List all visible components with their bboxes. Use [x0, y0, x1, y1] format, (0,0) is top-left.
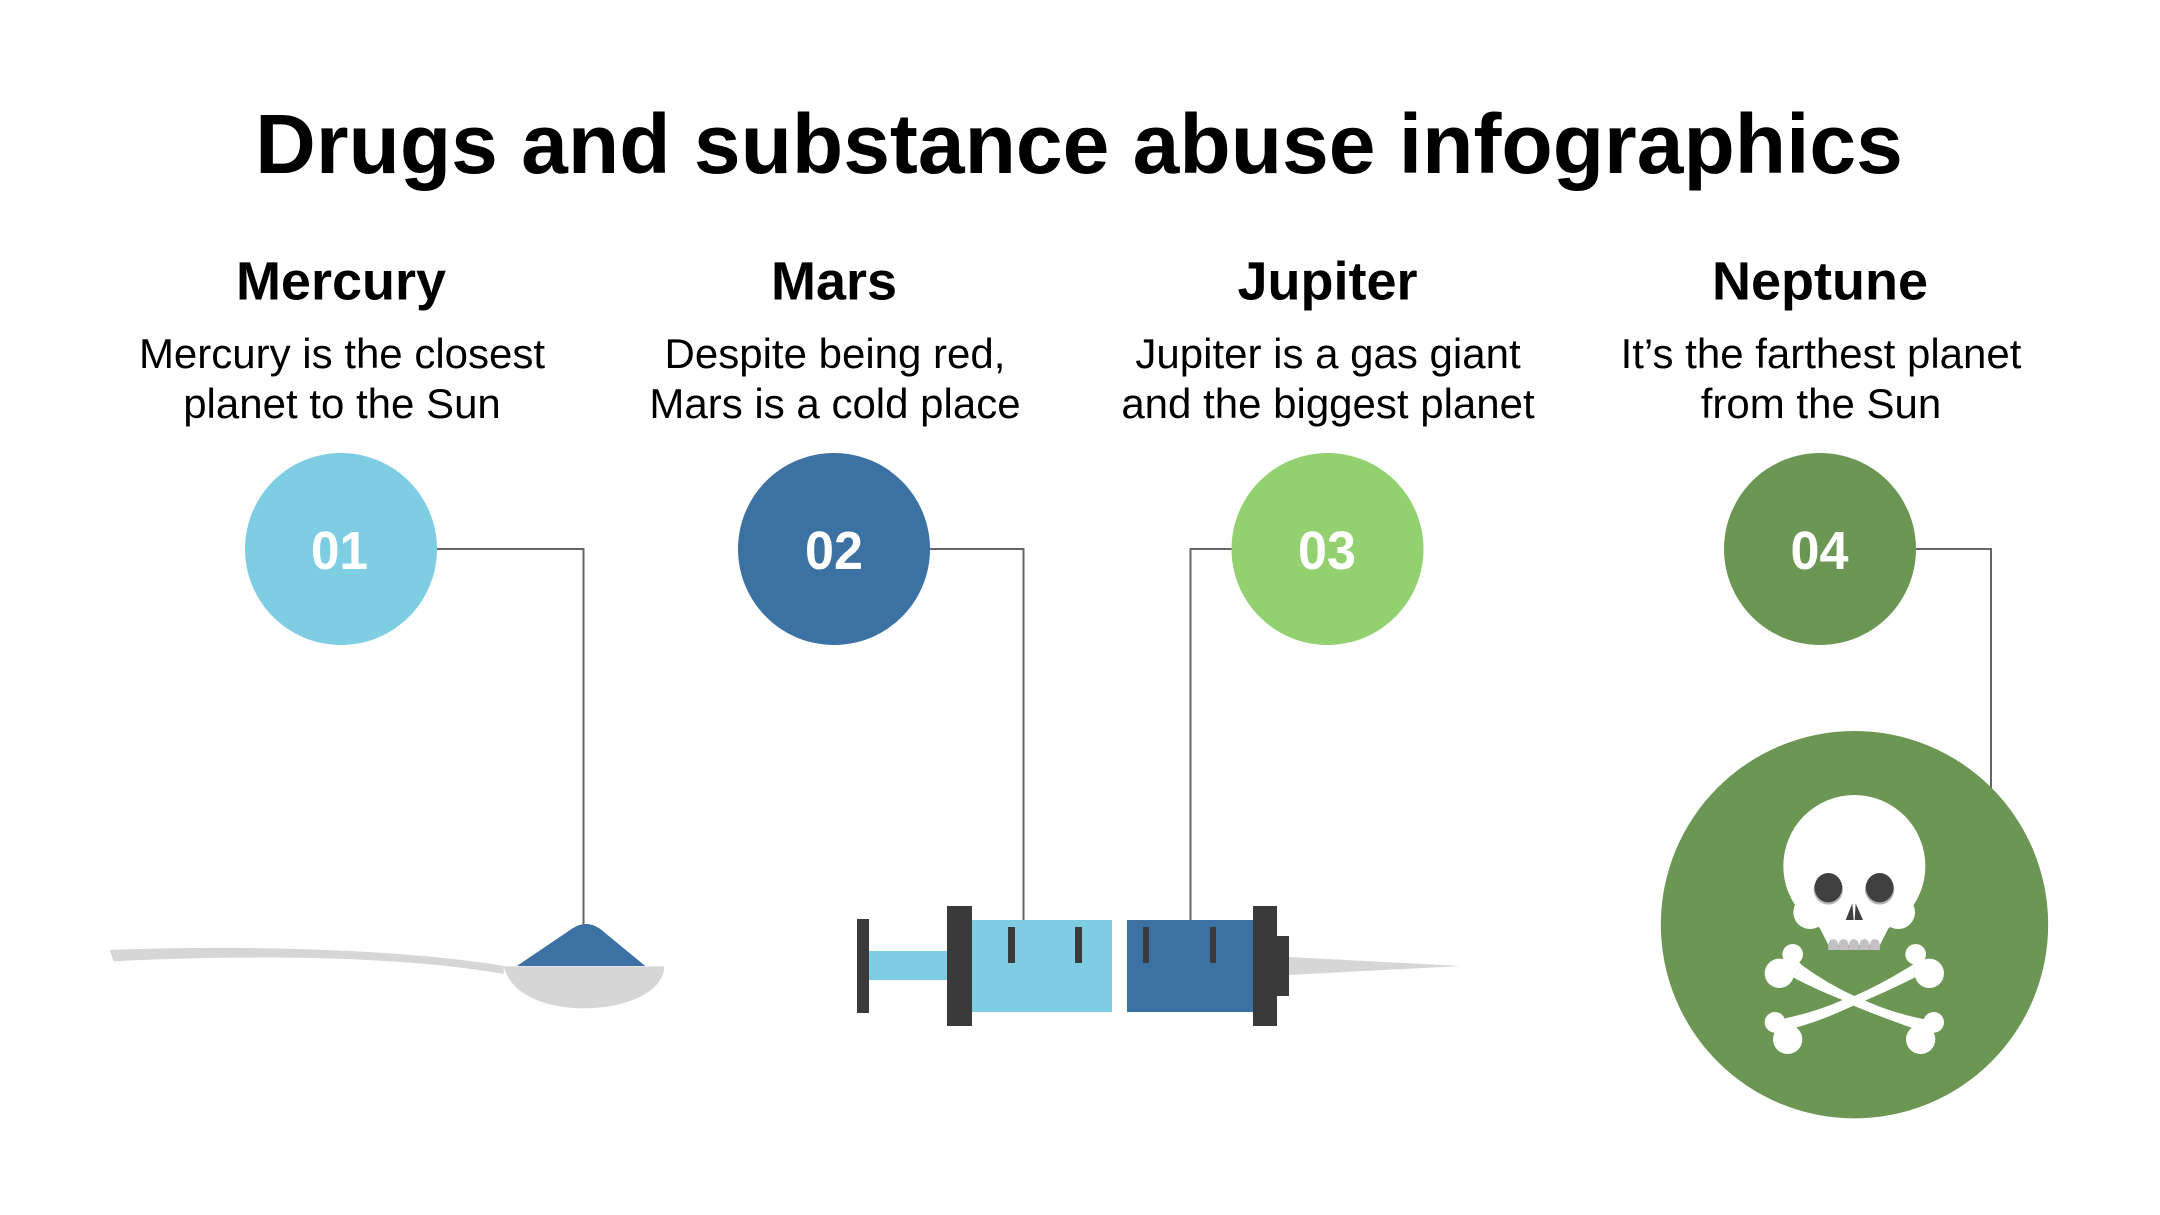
number circle 01 [245, 453, 437, 645]
icon: skull and crossbones [1661, 731, 2048, 1118]
connector: 02 to syringe [930, 549, 1024, 920]
number circle 01: 01 [311, 521, 368, 581]
text: Mars description: Mars is a cold place [649, 380, 1021, 427]
text: Mercury description: Mercury is the closest [139, 330, 545, 377]
text: Mercury description: planet to the Sun [183, 380, 501, 427]
icon: spoon with powder [110, 924, 664, 1008]
heading: Neptune: Neptune [1712, 252, 1928, 312]
connector: 04 to skull [1916, 549, 1991, 790]
number circle 02 [738, 453, 930, 645]
connector: 03 to syringe [1190, 549, 1232, 920]
text: Neptune description: It’s the farthest planet [1621, 330, 2022, 377]
number circle 04 [1724, 453, 1916, 645]
icon: syringe [857, 906, 1461, 1026]
column: Neptune [1621, 252, 2022, 645]
number circle 03 [1232, 453, 1424, 645]
heading: Mars: Mars [771, 252, 897, 312]
text: Mars description: Despite being red, [665, 330, 1005, 377]
heading: Mercury: Mercury [236, 252, 446, 312]
heading: Jupiter: Jupiter [1237, 252, 1418, 312]
number circle 04: 04 [1790, 521, 1848, 581]
text: Jupiter description: and the biggest planet [1121, 380, 1535, 427]
text: Jupiter description: Jupiter is a gas giant [1135, 330, 1521, 377]
column: Mercury [139, 252, 545, 645]
column: Jupiter [1121, 252, 1535, 645]
connector: 01 to spoon [436, 549, 584, 925]
number circle 02: 02 [805, 521, 863, 581]
title: Drugs and substance abuse infographics [255, 97, 1903, 191]
number circle 03: 03 [1298, 521, 1356, 581]
text: Neptune description: from the Sun [1701, 380, 1941, 427]
column: Mars [649, 252, 1021, 645]
